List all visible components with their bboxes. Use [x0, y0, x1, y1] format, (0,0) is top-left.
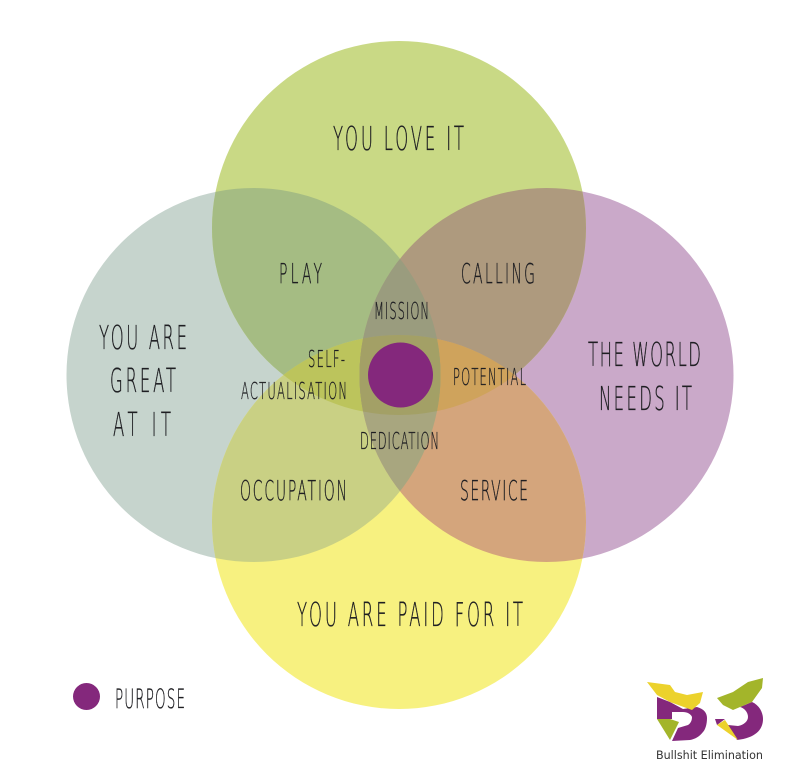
- label: self-actualisation: SELF-: [308, 347, 345, 373]
- label: mission: MISSION: [374, 299, 429, 325]
- label: you are great at it: [99, 320, 187, 445]
- overlap: centre: [360, 335, 440, 415]
- label: you are great at it: YOU ARE: [99, 320, 187, 358]
- legend: purpose: [73, 683, 185, 716]
- logo caption: Bullshit Elimination: [656, 748, 763, 762]
- legend dot: [73, 683, 100, 710]
- overlap: service: [363, 339, 586, 562]
- circle: the world needs it: [360, 188, 734, 562]
- overlap: dedication: [363, 411, 437, 491]
- label: service: SERVICE: [460, 475, 528, 508]
- legend text: PURPOSE: [115, 684, 185, 716]
- logo: bullshit elimination: [647, 678, 763, 762]
- label: you are great at it: AT IT: [113, 407, 171, 445]
- circle: you are great at it: [66, 188, 440, 562]
- logo s green band: [717, 678, 763, 710]
- overlap: self-actualisation: [284, 338, 363, 412]
- venn diagram: [66, 41, 734, 709]
- logo b green facet: [657, 719, 679, 740]
- logo b yellow band: [647, 682, 703, 710]
- overlap: calling: [363, 188, 586, 375]
- circle: you are paid for it: [212, 335, 586, 709]
- label: dedication: DEDICATION: [360, 429, 439, 455]
- label: play: PLAY: [279, 258, 322, 291]
- label: the world needs it: NEEDS IT: [599, 381, 692, 419]
- label: the world needs it: THE WORLD: [588, 337, 701, 375]
- label: you love it: YOU LOVE IT: [333, 121, 464, 159]
- circle: you love it: [212, 41, 586, 415]
- label: you are paid for it: YOU ARE PAID FOR IT: [297, 597, 523, 635]
- label: you are great at it: GREAT: [110, 363, 176, 401]
- label: the world needs it: [588, 337, 701, 419]
- label: calling: CALLING: [461, 258, 535, 291]
- label: self-actualisation: [241, 347, 347, 405]
- logo letter b: [657, 697, 707, 741]
- label: potential: POTENTIAL: [453, 365, 526, 391]
- logo s small purple facet: [715, 719, 725, 725]
- purpose centre dot: [368, 342, 433, 408]
- logo letter s: [728, 702, 763, 740]
- overlap: mission: [363, 259, 440, 401]
- label: self-actualisation: ACTUALISATION: [241, 379, 347, 405]
- overlap: occupation: [212, 339, 400, 562]
- overlap: play: [212, 188, 400, 375]
- label: occupation: OCCUPATION: [240, 475, 347, 508]
- overlap: potential: [437, 339, 514, 411]
- logo s yellow facet: [717, 720, 738, 740]
